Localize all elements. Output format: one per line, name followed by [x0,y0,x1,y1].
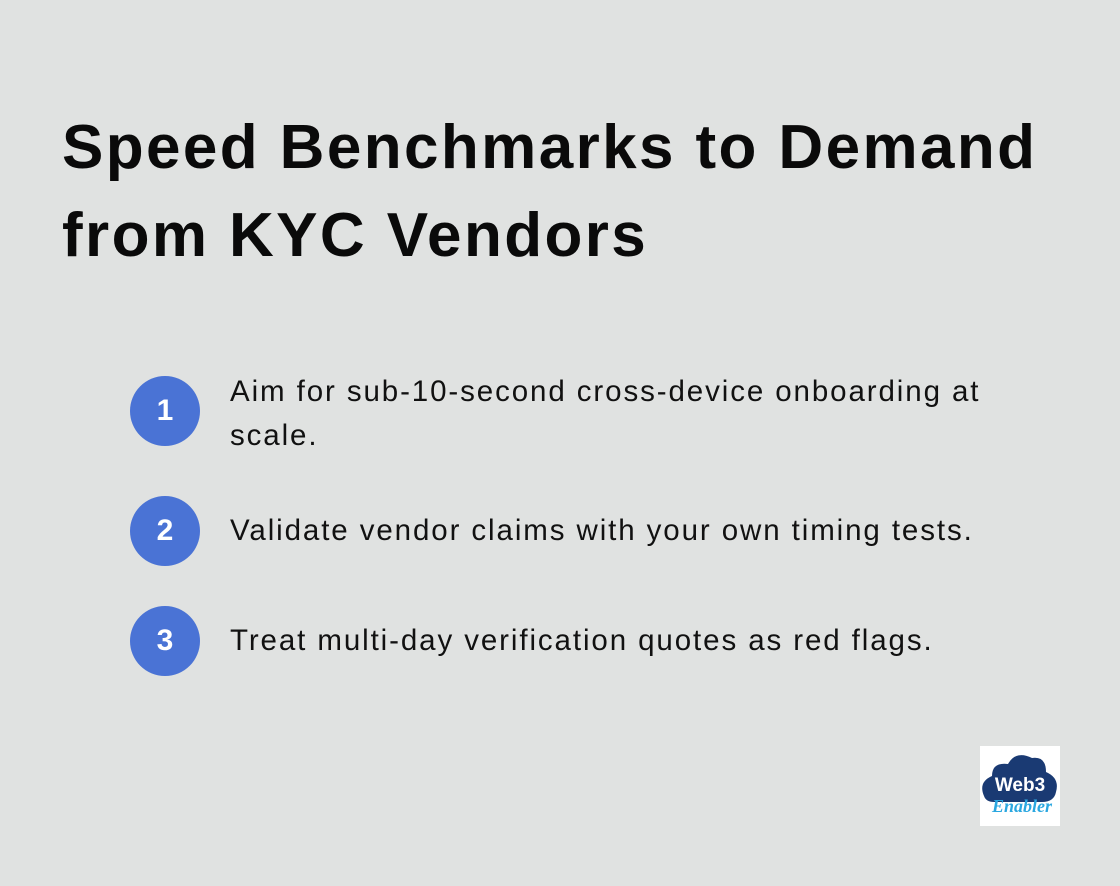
item 3 [130,606,934,676]
logo: Web3 [995,775,1045,796]
title: Speed Benchmarks to Demand [62,113,1037,182]
logo [980,746,1060,826]
item 2 [130,496,974,566]
icon: number 2 [130,496,200,566]
icon: number 2: 2 [157,514,173,547]
icon: number 3: 3 [157,624,173,657]
text 2: Validate vendor claims with your own timing tests. [230,514,974,547]
item 1 [130,375,980,452]
icon: number 3 [130,606,200,676]
text 3: Treat multi-day verification quotes as red flags. [230,624,934,657]
title: from KYC Vendors [62,201,648,270]
title [62,113,1037,270]
logo: Enabler [991,796,1053,816]
icon: number 1 [130,376,200,446]
icon: number 1: 1 [157,394,173,427]
text 1: Aim for sub-10-second cross-device onboarding at scale. [230,375,980,452]
